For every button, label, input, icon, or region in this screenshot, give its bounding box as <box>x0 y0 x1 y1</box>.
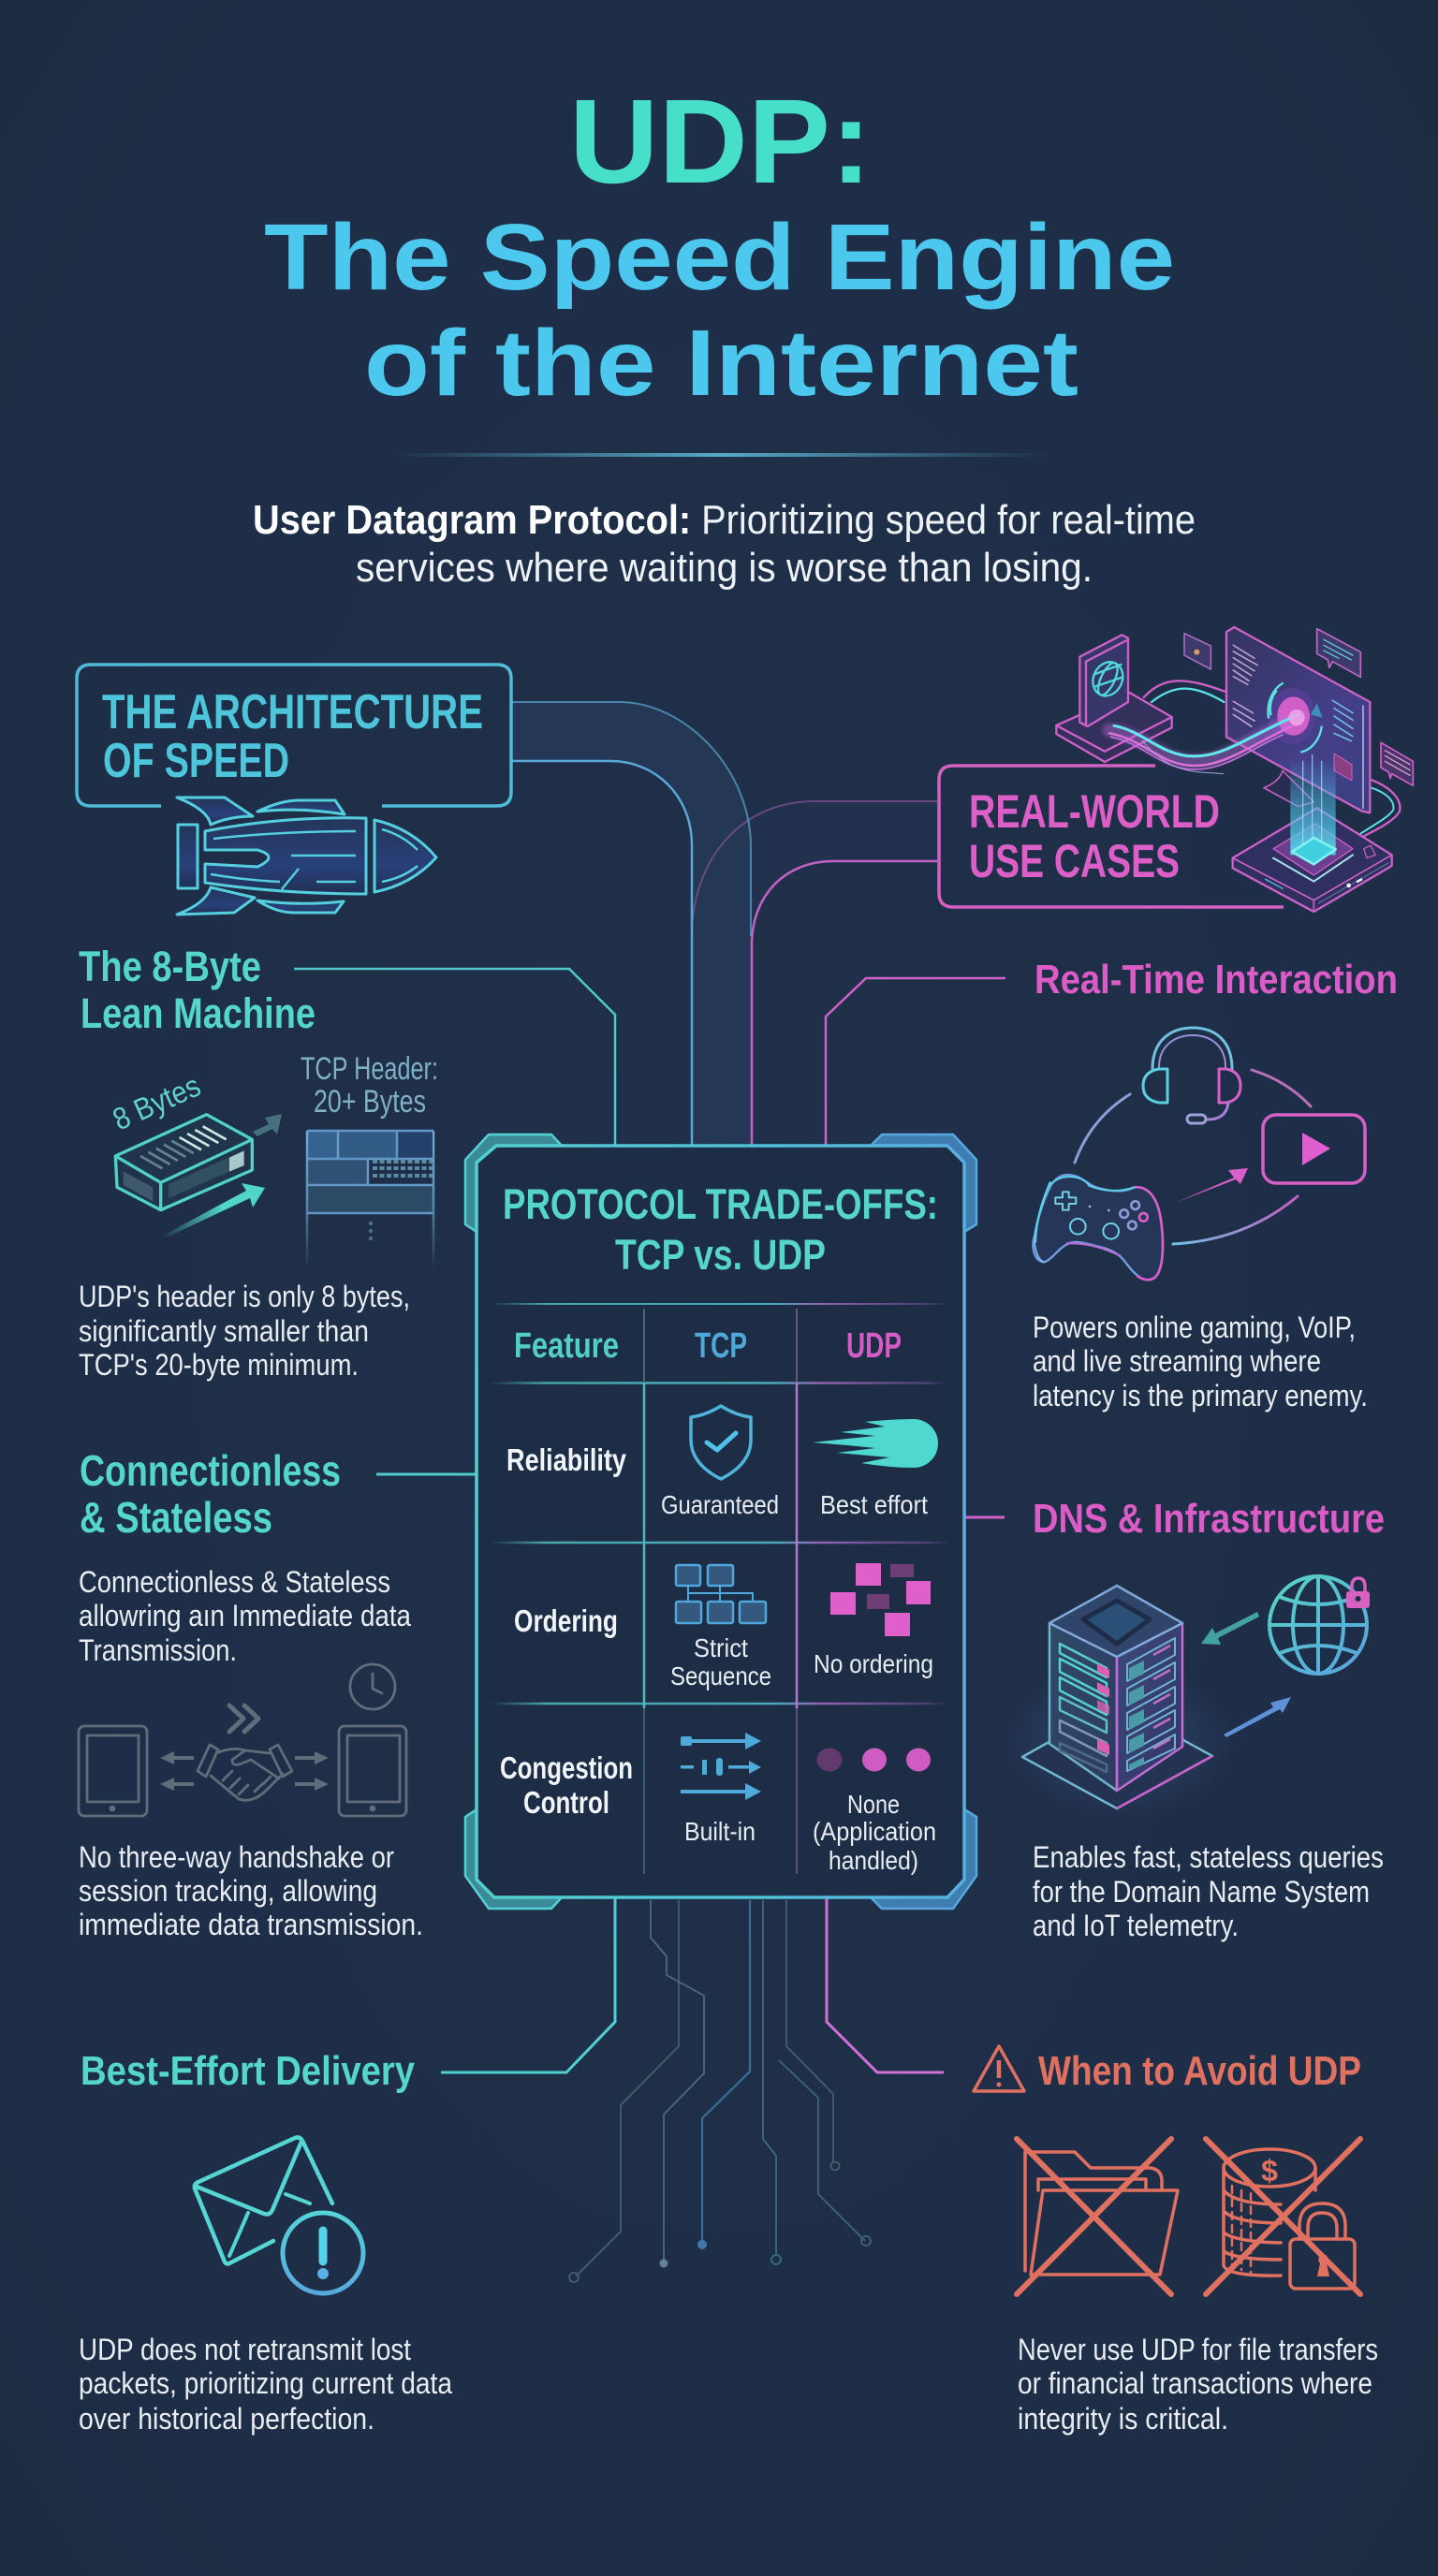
body text: dns: Enables fast, stateless queries <box>1033 1840 1384 1874</box>
body text: connectionless intro: Transmission. <box>79 1633 237 1667</box>
cycle arcs <box>1075 1094 1130 1163</box>
heading box: real-world use cases <box>939 766 1284 907</box>
panel: protocol trade-offs <box>465 1134 976 1909</box>
row: ordering: Strict <box>694 1633 748 1662</box>
subtitle: services where waiting is worse than losing. <box>356 545 1093 591</box>
body text: best-effort <box>79 2333 452 2436</box>
right link <box>1360 780 1400 838</box>
icon: rocket <box>177 798 436 915</box>
row: reliability <box>506 1406 938 1519</box>
body text: connectionless intro: allowring aın Immediate data <box>79 1599 411 1632</box>
panel title: PROTOCOL TRADE-OFFS: <box>503 1180 938 1228</box>
body text: real-time: Powers online gaming, VoIP, <box>1033 1310 1356 1344</box>
icon: tcp header table: 20+ Bytes <box>314 1084 426 1120</box>
body text: no handshake: immediate data transmission. <box>79 1908 423 1941</box>
body text: no handshake: No three-way handshake or <box>79 1840 394 1874</box>
headset <box>1143 1028 1240 1123</box>
icon: crossed coins and lock: $ <box>1261 2154 1278 2188</box>
icon: dots <box>816 1749 931 1771</box>
data beam <box>1109 718 1299 761</box>
heading box: real-world use cases: REAL-WORLD <box>969 785 1220 838</box>
icon: org chart <box>676 1565 766 1623</box>
controller <box>1033 1175 1163 1280</box>
body text: when to avoid <box>1018 2333 1378 2436</box>
icon: shield <box>691 1406 751 1479</box>
body text: dns: for the Domain Name System <box>1033 1875 1370 1909</box>
body text: when to avoid: Never use UDP for file transfers <box>1018 2333 1378 2366</box>
row: congestion control: Congestion <box>500 1750 633 1785</box>
icon: warning triangle <box>974 2046 1024 2091</box>
title: of the Internet <box>364 311 1078 416</box>
body text: best-effort: packets, prioritizing current data <box>79 2366 452 2400</box>
panel title: TCP vs. UDP <box>615 1231 826 1279</box>
heading box: real-world use cases: USE CASES <box>969 835 1180 887</box>
arrow: globe to server <box>1201 1612 1259 1645</box>
body text: 8-byte: TCP's 20-byte minimum. <box>79 1348 359 1382</box>
back links <box>1144 681 1226 697</box>
subtitle <box>253 497 1196 591</box>
icon: flow arrows <box>681 1733 761 1800</box>
title: The Speed Engine <box>264 205 1175 310</box>
card top <box>1184 634 1211 669</box>
icon: envelope with alert <box>195 2137 363 2293</box>
body text: when to avoid: or financial transactions where <box>1018 2366 1372 2400</box>
table grid <box>491 1304 948 1874</box>
icon: server tower <box>1000 1586 1234 1821</box>
table header row: Feature <box>514 1326 619 1366</box>
heading box: the architecture of speed <box>77 665 511 806</box>
icon: 8-byte header box <box>108 1068 282 1237</box>
monitor <box>1226 627 1370 812</box>
row: congestion control: (Application <box>813 1817 936 1846</box>
icon: globe with lock <box>1269 1576 1370 1674</box>
heading box: the architecture of speed: OF SPEED <box>103 734 289 788</box>
body text: 8-byte <box>79 1280 410 1382</box>
body text: real-time: and live streaming where <box>1033 1344 1321 1378</box>
heading: the 8-byte lean machine: Lean Machine <box>81 989 315 1037</box>
leader line: connectionless <box>376 1473 477 1475</box>
leader line: best-effort <box>441 1898 615 2072</box>
row: reliability: Guaranteed <box>661 1490 779 1519</box>
row: ordering <box>514 1563 933 1690</box>
body text: when to avoid: integrity is critical. <box>1018 2402 1228 2436</box>
title <box>264 75 1175 416</box>
body text: best-effort: over historical perfection. <box>79 2402 374 2436</box>
leader line: 8-byte <box>294 969 615 1145</box>
heading: best-effort delivery: Best-Effort Delivery <box>81 2048 415 2094</box>
leader line: dns <box>965 1516 1005 1518</box>
icon: handshake between devices <box>79 1664 406 1816</box>
row: ordering: Ordering <box>514 1603 618 1638</box>
body text: best-effort: UDP does not retransmit lost <box>79 2333 411 2366</box>
stand <box>1264 770 1313 807</box>
panel title <box>503 1180 938 1279</box>
icon: tcp header table <box>301 1051 438 1269</box>
body text: no handshake <box>79 1840 423 1941</box>
heading box: the architecture of speed: THE ARCHITECTURE <box>102 685 483 739</box>
leader line: real-time <box>826 978 1005 1145</box>
icon: gaming, voice and streaming cycle <box>1033 1028 1365 1280</box>
row: ordering: No ordering <box>814 1649 933 1678</box>
body text: real-time <box>1033 1310 1368 1412</box>
corner brackets <box>465 1134 976 1909</box>
leader line: when to avoid <box>827 1898 944 2072</box>
body text: connectionless intro <box>79 1565 411 1667</box>
title: UDP: <box>569 75 872 209</box>
body text: 8-byte: UDP's header is only 8 bytes, <box>79 1280 410 1313</box>
connector tubes <box>511 702 937 1145</box>
subtitle: User Datagram Protocol: Prioritizing speed for real-time <box>253 497 1196 543</box>
body text: 8-byte: significantly smaller than <box>79 1314 369 1348</box>
body text: dns: and IoT telemetry. <box>1033 1909 1239 1942</box>
heading: connectionless & stateless: Connectionless <box>80 1446 341 1495</box>
play button <box>1263 1115 1365 1183</box>
heading: when to avoid udp <box>974 2046 1361 2094</box>
arrow <box>1175 1168 1248 1203</box>
heading: dns & infrastructure: DNS & Infrastructure <box>1033 1496 1385 1542</box>
table header row: TCP <box>695 1326 747 1366</box>
body text: connectionless intro: Connectionless & Stateless <box>79 1565 390 1599</box>
row: reliability: Reliability <box>506 1442 627 1477</box>
body text: no handshake: session tracking, allowing <box>79 1874 377 1908</box>
row: congestion control <box>500 1733 936 1875</box>
row: congestion control: handled) <box>829 1846 918 1875</box>
row: ordering: Sequence <box>670 1661 771 1690</box>
table header row <box>514 1326 902 1366</box>
icon: crossed folder <box>1017 2139 1178 2294</box>
body text: real-time: latency is the primary enemy. <box>1033 1379 1368 1412</box>
chat cards <box>1317 629 1360 677</box>
icon: 8-byte header box: 8 Bytes <box>108 1068 205 1136</box>
row: congestion control: Built-in <box>684 1817 756 1846</box>
heading: when to avoid udp: When to Avoid UDP <box>1038 2048 1361 2094</box>
heading: the 8-byte lean machine <box>79 943 315 1037</box>
row: congestion control: None <box>847 1790 900 1819</box>
heading: connectionless & stateless: & Stateless <box>80 1493 272 1542</box>
icon: tcp header table: TCP Header: <box>301 1051 438 1087</box>
icon: scattered packets <box>830 1563 931 1636</box>
heading: connectionless & stateless <box>80 1446 341 1542</box>
icon: comet <box>813 1419 938 1468</box>
table header row: UDP <box>846 1326 902 1366</box>
panel frame <box>477 1146 964 1897</box>
icon: crossed coins and lock <box>1206 2139 1360 2294</box>
body text: dns <box>1033 1840 1384 1942</box>
row: reliability: Best effort <box>820 1490 928 1519</box>
glow pillar <box>1290 761 1336 855</box>
circuit traces under panel <box>569 1900 871 2282</box>
left device <box>1056 635 1172 762</box>
row: congestion control: Control <box>523 1785 609 1820</box>
arrow: server to globe <box>1224 1697 1291 1737</box>
icon: isometric data flow illustration <box>1056 627 1413 912</box>
heading: the 8-byte lean machine: The 8-Byte <box>79 943 261 990</box>
base unit <box>1233 808 1392 912</box>
